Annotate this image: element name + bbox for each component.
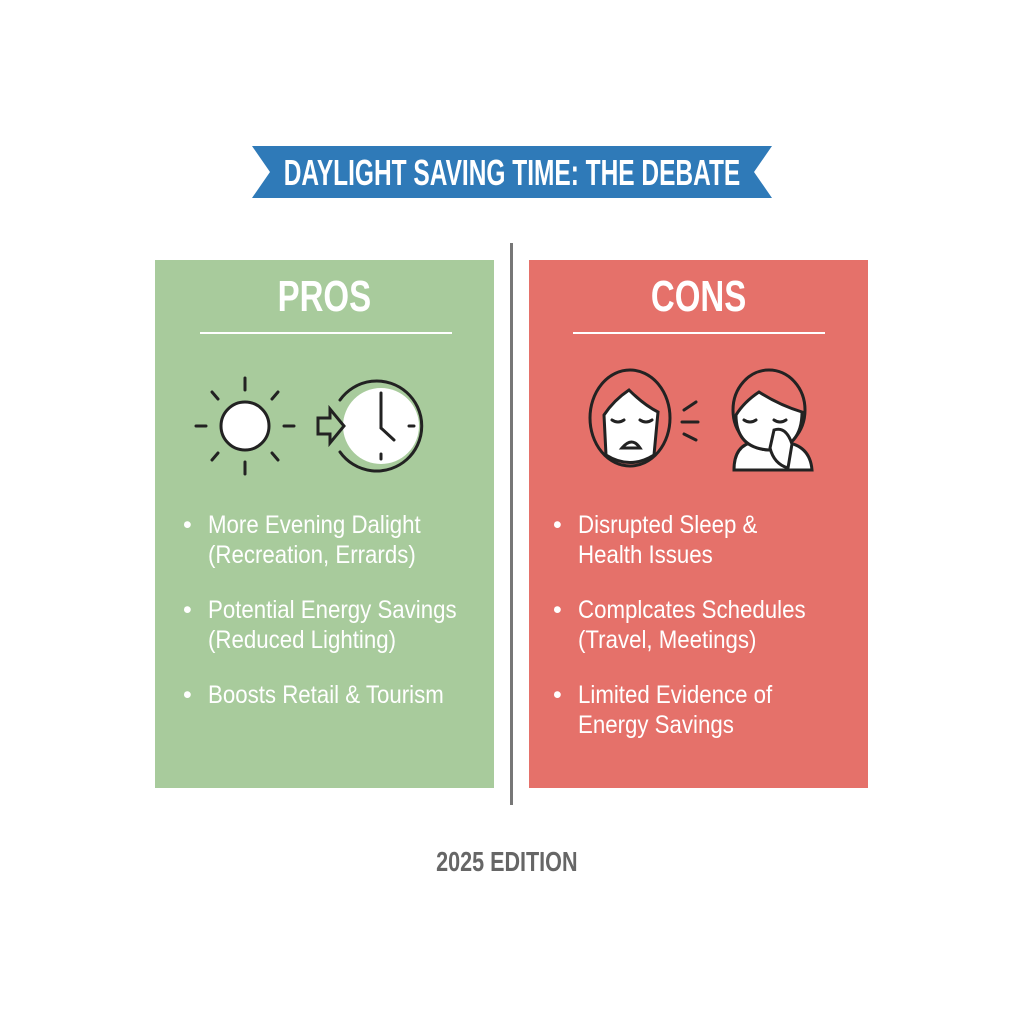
icon: tired faces: [588, 368, 814, 472]
pros heading: PROS: [278, 272, 371, 321]
pros list: Potential Energy Savings: [208, 596, 457, 624]
icon: sun and clock: [194, 376, 424, 476]
cons list: Health Issues: [578, 541, 713, 569]
divider: [510, 243, 513, 805]
title banner: [252, 146, 772, 198]
title banner: DAYLIGHT SAVING TIME: THE DEBATE: [284, 152, 740, 193]
pros list: (Recreation, Errards): [208, 541, 416, 569]
footer: edition: 2025 EDITION: [436, 846, 578, 877]
cons list: (Travel, Meetings): [578, 626, 756, 654]
panel: cons: [529, 260, 868, 788]
pros list: More Evening Dalight: [208, 511, 421, 539]
cons list: Complcates Schedules: [578, 596, 806, 624]
cons heading: CONS: [651, 272, 746, 321]
cons list: Energy Savings: [578, 711, 734, 739]
cons list: Limited Evidence of: [578, 681, 772, 709]
panel: pros: [155, 260, 494, 788]
pros list: [184, 511, 457, 709]
pros list: (Reduced Lighting): [208, 626, 396, 654]
pros list: Boosts Retail & Tourism: [208, 681, 444, 709]
cons list: [554, 511, 806, 739]
cons list: Disrupted Sleep &: [578, 511, 757, 539]
